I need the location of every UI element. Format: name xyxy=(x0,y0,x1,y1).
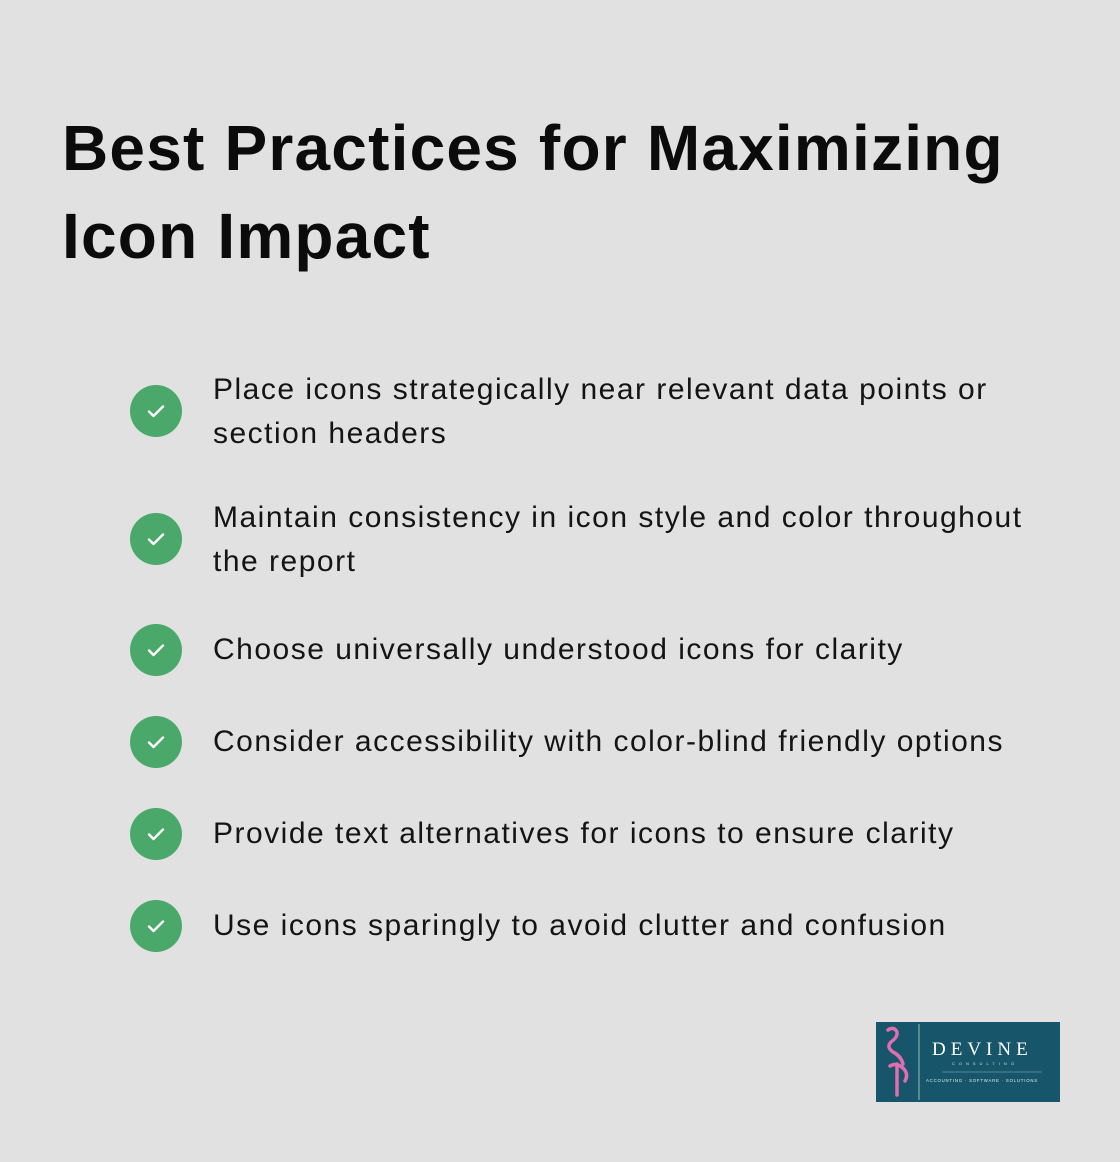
icon: check xyxy=(130,624,182,676)
icon: check xyxy=(130,900,182,952)
text: the report xyxy=(213,545,356,578)
icon: check xyxy=(130,808,182,860)
text: section headers xyxy=(213,417,447,450)
list item 1 xyxy=(130,373,988,450)
icon: check xyxy=(130,513,182,565)
logo: DEVINE xyxy=(932,1039,1033,1060)
title xyxy=(62,112,1004,272)
text: Use icons sparingly to avoid clutter and confusion xyxy=(213,909,947,942)
list item 4 xyxy=(130,716,1004,768)
text xyxy=(213,373,988,450)
logo: ACCOUNTING · SOFTWARE · SOLUTIONS xyxy=(926,1078,1038,1083)
title: Best Practices for Maximizing xyxy=(62,112,1004,184)
logo xyxy=(876,1022,1060,1102)
text: Choose universally understood icons for clarity xyxy=(213,633,904,666)
text: Maintain consistency in icon style and color throughout xyxy=(213,501,1023,534)
list item 5 xyxy=(130,808,954,860)
text: Consider accessibility with color-blind friendly options xyxy=(213,725,1004,758)
icon: check xyxy=(130,385,182,437)
icon: check xyxy=(130,716,182,768)
text: Provide text alternatives for icons to ensure clarity xyxy=(213,817,954,850)
text: Place icons strategically near relevant data points or xyxy=(213,373,988,406)
list item 3 xyxy=(130,624,904,676)
title: Icon Impact xyxy=(62,200,431,272)
list item 2 xyxy=(130,501,1023,578)
text xyxy=(213,501,1023,578)
list item 6 xyxy=(130,900,947,952)
logo: CONSULTING xyxy=(952,1061,1018,1066)
